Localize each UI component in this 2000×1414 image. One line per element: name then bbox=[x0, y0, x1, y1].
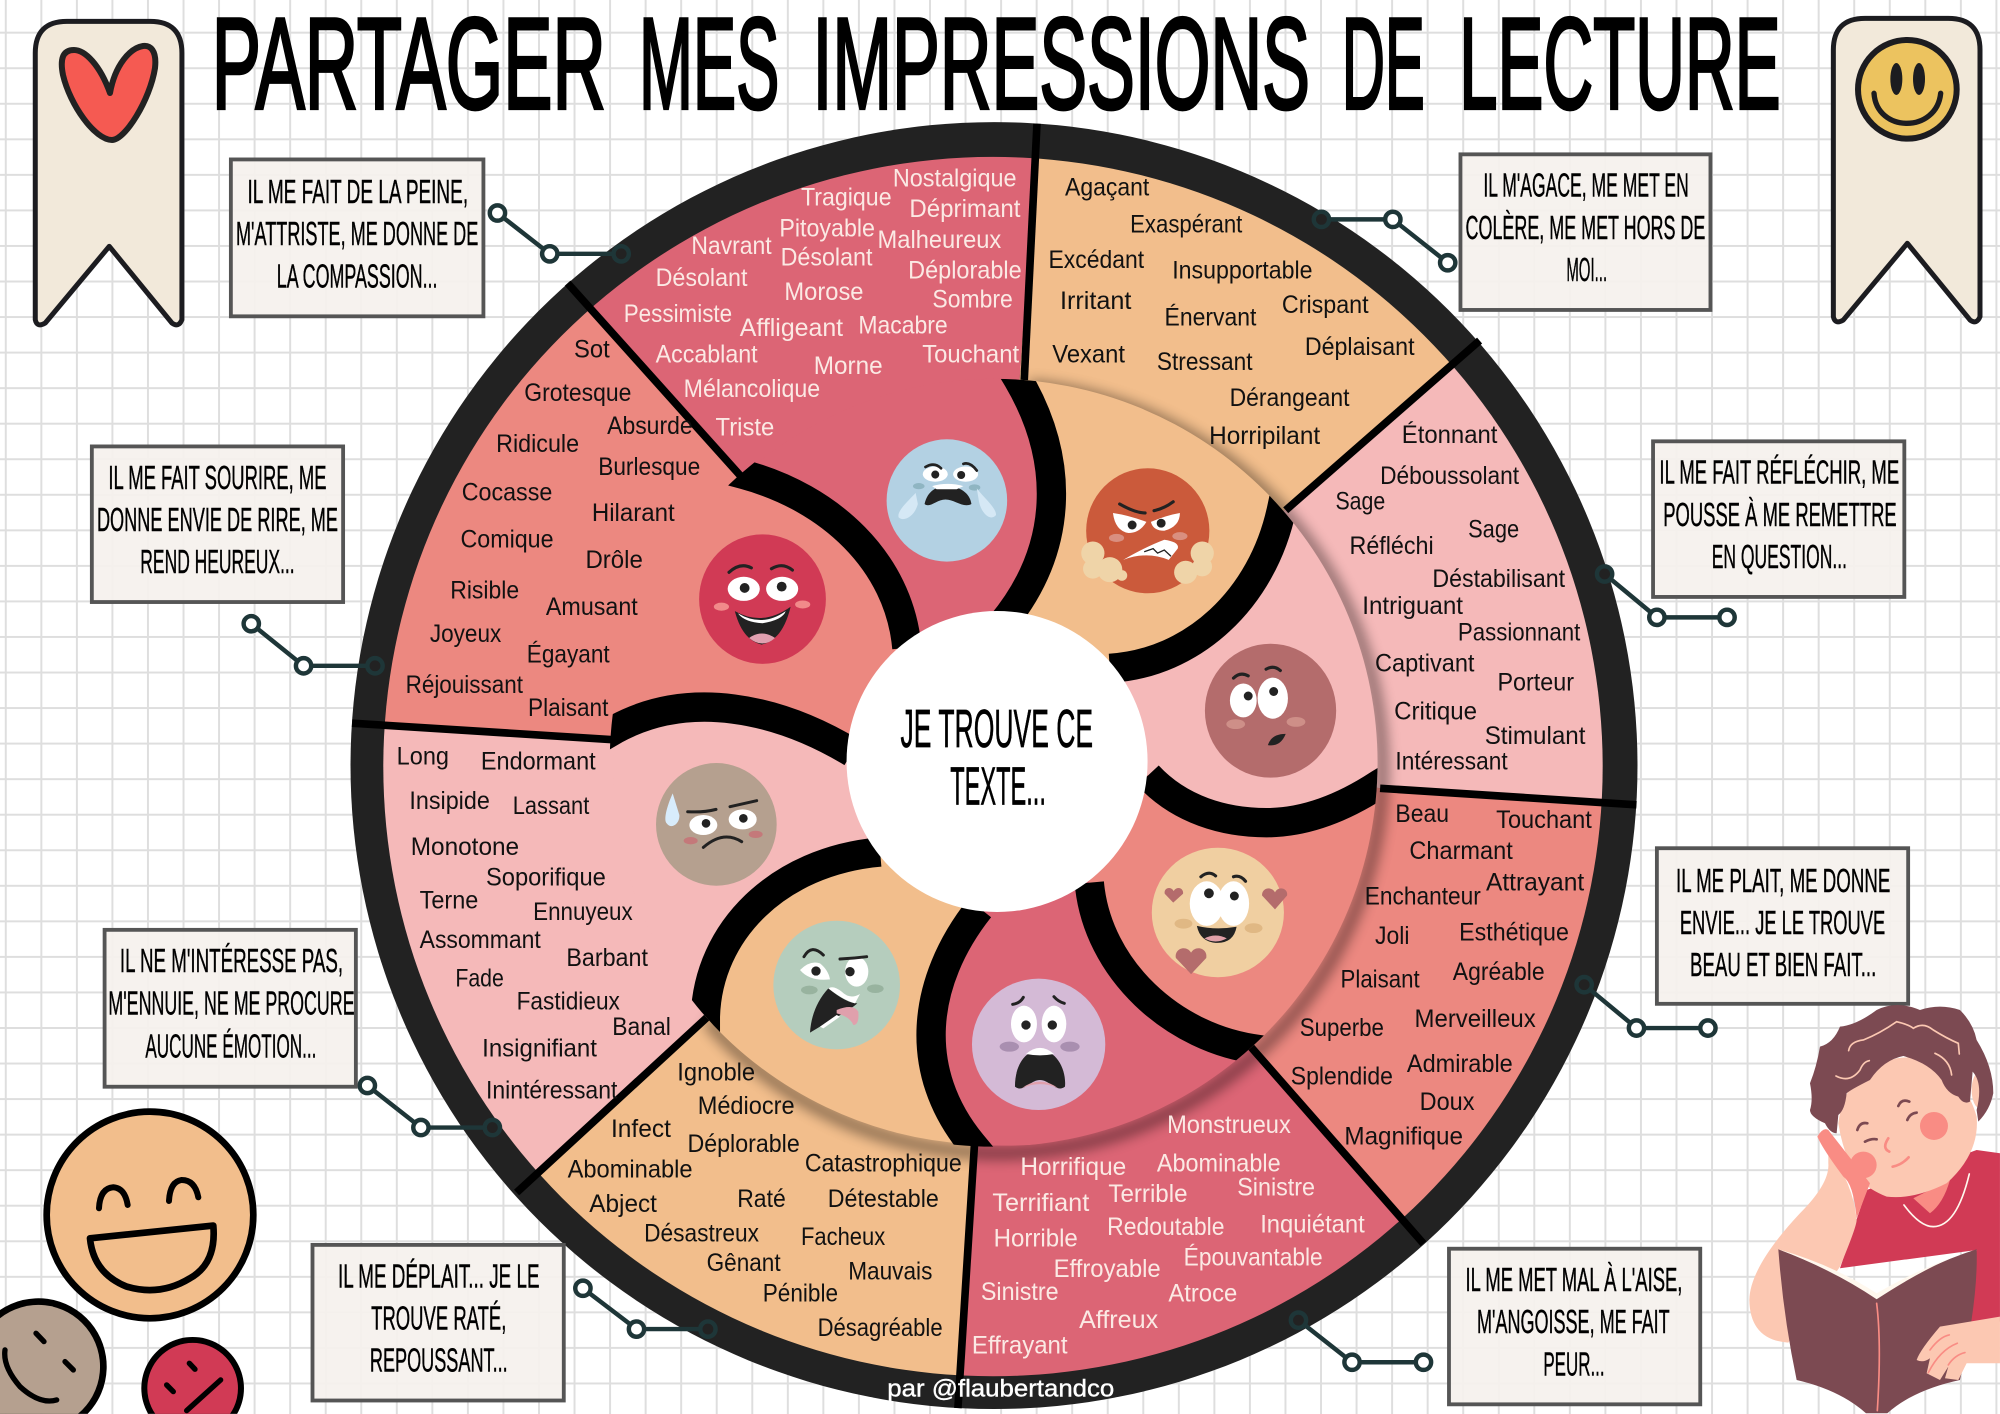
word list: dislike: Gênant bbox=[707, 1249, 781, 1277]
word list: anger: Énervant bbox=[1165, 303, 1256, 332]
connector: fear bbox=[1291, 1312, 1431, 1370]
callout: anger: COLÈRE, ME MET HORS DE bbox=[1466, 210, 1705, 247]
connector: amusement bbox=[244, 616, 383, 673]
callout: anger bbox=[1460, 154, 1710, 310]
center circle with text: JE TROUVE CE bbox=[901, 700, 1093, 759]
word list: beauty: Joli bbox=[1375, 922, 1409, 950]
word list: boredom: Long bbox=[397, 742, 449, 770]
word list: sadness: Accablant bbox=[656, 341, 758, 369]
word list: sadness: Désolant bbox=[656, 264, 748, 292]
callout: dislike: IL ME DÉPLAIT... JE LE bbox=[338, 1258, 540, 1295]
word list: fear: Sinistre bbox=[1237, 1173, 1315, 1201]
callout: beauty bbox=[1657, 848, 1908, 1004]
word list: beauty: Beau bbox=[1395, 800, 1449, 828]
word list: boredom: Inintéressant bbox=[486, 1077, 617, 1105]
word list: sadness: Pitoyable bbox=[779, 214, 875, 242]
word list: reflection bbox=[1335, 420, 1586, 775]
emoji: crying blue face bbox=[887, 439, 1007, 562]
callout: fear: IL ME MET MAL À L'AISE, bbox=[1466, 1262, 1682, 1299]
word list: beauty: Magnifique bbox=[1344, 1122, 1463, 1150]
word list: sadness: Touchant bbox=[922, 341, 1019, 369]
connector: reflection bbox=[1597, 566, 1735, 625]
word list: fear: Effrayant bbox=[972, 1332, 1068, 1360]
word list: reflection: Captivant bbox=[1375, 649, 1475, 677]
callout: amusement: IL ME FAIT SOURIRE, ME bbox=[108, 460, 327, 497]
word list: beauty: Doux bbox=[1420, 1088, 1475, 1116]
word list: sadness: Affligeant bbox=[740, 314, 843, 342]
word list: dislike bbox=[568, 1059, 962, 1342]
emoji: angry red-orange face bbox=[1081, 468, 1214, 593]
icon: bookmark with heart bbox=[35, 21, 182, 325]
word list: boredom: Endormant bbox=[481, 747, 596, 775]
word list: beauty: Attrayant bbox=[1486, 869, 1584, 897]
word list: beauty: Splendide bbox=[1291, 1063, 1393, 1091]
word list: boredom: Soporifique bbox=[486, 864, 606, 892]
word list: boredom: Terne bbox=[420, 887, 478, 915]
callout: boredom: AUCUNE ÉMOTION... bbox=[145, 1029, 316, 1066]
callout: dislike: TROUVE RATÉ, bbox=[371, 1300, 506, 1337]
word list: fear bbox=[972, 1111, 1365, 1360]
word list: fear: Effroyable bbox=[1054, 1255, 1161, 1283]
word list: dislike: Ignoble bbox=[677, 1059, 755, 1087]
word list: sadness: Malheureux bbox=[878, 226, 1002, 254]
word list: beauty: Admirable bbox=[1407, 1050, 1513, 1078]
word list: beauty: Charmant bbox=[1409, 837, 1513, 865]
emoji: scared purple face bbox=[972, 979, 1105, 1110]
word list: reflection: Passionnant bbox=[1458, 619, 1580, 647]
word list: anger: Horripilant bbox=[1209, 422, 1320, 450]
word list: fear: Redoutable bbox=[1107, 1213, 1224, 1241]
word list: amusement: Cocasse bbox=[462, 478, 552, 506]
word list: amusement: Drôle bbox=[585, 546, 643, 574]
word list: dislike: Raté bbox=[737, 1185, 786, 1213]
word list: fear: Épouvantable bbox=[1184, 1243, 1323, 1272]
emoji: happy red face bbox=[699, 534, 826, 664]
callout: fear bbox=[1449, 1249, 1700, 1404]
word list: anger: Agaçant bbox=[1065, 173, 1149, 201]
emoji: annoyed taupe face bbox=[656, 763, 777, 886]
word list: beauty: Esthétique bbox=[1459, 918, 1569, 946]
word list: amusement: Burlesque bbox=[598, 453, 700, 481]
callout: dislike bbox=[313, 1245, 564, 1401]
word list: amusement: Ridicule bbox=[496, 430, 579, 458]
word list: sadness: Tragique bbox=[801, 184, 892, 212]
word list: fear: Terrible bbox=[1108, 1180, 1187, 1208]
word list: sadness: Désolant bbox=[781, 244, 873, 272]
connector: dislike bbox=[575, 1281, 716, 1337]
word list: sadness: Morose bbox=[784, 278, 864, 306]
connector: anger bbox=[1314, 212, 1455, 270]
emoji: love face with hearts bbox=[1152, 848, 1287, 977]
word list: anger: Excédant bbox=[1048, 246, 1144, 274]
word list: fear: Abominable bbox=[1157, 1149, 1281, 1177]
emoji: disgusted green face bbox=[773, 921, 900, 1049]
word list: boredom: Assommant bbox=[420, 926, 541, 954]
word list: dislike: Désagréable bbox=[818, 1314, 943, 1342]
credit: par @flaubertandco bbox=[887, 1376, 1114, 1403]
word list: reflection: Étonnant bbox=[1402, 420, 1498, 449]
icon: red smiley bbox=[141, 1337, 244, 1414]
word list: sadness bbox=[624, 165, 1022, 441]
callout: anger: IL M'AGACE, ME MET EN bbox=[1483, 168, 1689, 205]
word list: anger: Vexant bbox=[1052, 341, 1125, 369]
word list: sadness: Déplorable bbox=[908, 256, 1022, 284]
word list: boredom: Monotone bbox=[411, 833, 519, 861]
word list: reflection: Déstabilisant bbox=[1432, 565, 1565, 593]
word list: beauty bbox=[1291, 800, 1592, 1150]
pinwheel petals bbox=[613, 378, 1379, 1146]
callout: boredom bbox=[105, 930, 356, 1087]
word list: boredom: Insignifiant bbox=[482, 1034, 597, 1062]
black pinwheel bands bbox=[599, 366, 1395, 1159]
word list: boredom: Insipide bbox=[409, 787, 490, 815]
word list: dislike: Pénible bbox=[763, 1279, 838, 1307]
word list: boredom: Fade bbox=[455, 964, 504, 992]
word list: amusement: Sot bbox=[574, 335, 610, 363]
word list: amusement: Absurde bbox=[607, 412, 693, 440]
callout: amusement: REND HEUREUX... bbox=[140, 544, 295, 581]
word list: boredom bbox=[397, 742, 671, 1105]
word list: fear: Affreux bbox=[1079, 1306, 1159, 1334]
word list: fear: Monstrueux bbox=[1167, 1111, 1291, 1139]
title bbox=[212, 0, 1781, 136]
word list: amusement: Joyeux bbox=[430, 620, 502, 648]
word list: anger: Irritant bbox=[1060, 287, 1131, 315]
word list: sadness: Morne bbox=[814, 352, 883, 380]
word list: anger: Exaspérant bbox=[1130, 210, 1242, 238]
word list: beauty: Plaisant bbox=[1341, 966, 1420, 994]
word list: reflection: Porteur bbox=[1497, 668, 1574, 696]
callout: boredom: M'ENNUIE, NE ME PROCURE bbox=[108, 985, 355, 1022]
word list: fear: Horrible bbox=[994, 1225, 1078, 1253]
callout: boredom: IL NE M'INTÉRESSE PAS, bbox=[120, 943, 343, 980]
word list: anger: Dérangeant bbox=[1230, 384, 1350, 412]
word list: boredom: Lassant bbox=[513, 792, 589, 820]
center circle with text bbox=[847, 611, 1148, 912]
word list: reflection: Stimulant bbox=[1485, 722, 1586, 750]
word list: boredom: Fastidieux bbox=[517, 987, 620, 1015]
word list: reflection: Critique bbox=[1394, 698, 1477, 726]
center circle with text: TEXTE... bbox=[950, 757, 1046, 816]
callout: reflection: EN QUESTION... bbox=[1712, 539, 1847, 576]
word list: sadness: Sombre bbox=[932, 286, 1013, 314]
word list: sadness: Déprimant bbox=[909, 195, 1020, 223]
callout: sadness: M'ATTRISTE, ME DONNE DE bbox=[236, 216, 478, 253]
wheel bbox=[350, 122, 1638, 1409]
word list: sadness: Macabre bbox=[858, 311, 948, 339]
word list: amusement: Plaisant bbox=[528, 694, 608, 722]
word list: reflection: Réfléchi bbox=[1349, 532, 1434, 560]
icon: laughing orange smiley bbox=[47, 1112, 253, 1318]
icon: taupe smiley bbox=[0, 1298, 107, 1414]
word list: dislike: Médiocre bbox=[698, 1092, 795, 1120]
outer dark ring bbox=[351, 122, 1637, 1409]
word list: dislike: Catastrophique bbox=[805, 1149, 962, 1177]
emoji: thinking brown face bbox=[1205, 644, 1336, 778]
word list: dislike: Mauvais bbox=[848, 1258, 932, 1286]
word list: amusement: Comique bbox=[460, 526, 554, 554]
word list: dislike: Abject bbox=[589, 1190, 657, 1218]
connector: boredom bbox=[360, 1078, 500, 1135]
callout: reflection bbox=[1653, 441, 1904, 597]
word list: beauty: Agréable bbox=[1453, 958, 1545, 986]
word list: dislike: Facheux bbox=[801, 1223, 886, 1251]
word list: beauty: Merveilleux bbox=[1415, 1005, 1536, 1033]
connector: sadness bbox=[490, 205, 629, 261]
callout: anger: MOI... bbox=[1566, 252, 1607, 289]
callout: fear: PEUR... bbox=[1543, 1346, 1605, 1383]
word list: anger: Insupportable bbox=[1172, 256, 1312, 284]
word list: dislike: Désastreux bbox=[644, 1219, 759, 1247]
word list: fear: Sinistre bbox=[981, 1278, 1059, 1306]
word list: reflection: Intéressant bbox=[1395, 747, 1508, 775]
word list: fear: Horrifique bbox=[1020, 1153, 1126, 1181]
word list: dislike: Détestable bbox=[828, 1185, 939, 1213]
word list: fear: Inquiétant bbox=[1260, 1210, 1365, 1238]
callout: amusement bbox=[92, 446, 343, 602]
word list: fear: Terrifiant bbox=[992, 1189, 1089, 1217]
word list: reflection: Intriguant bbox=[1362, 592, 1463, 620]
outer sectors bbox=[383, 156, 1603, 1376]
word list: dislike: Abominable bbox=[568, 1156, 693, 1184]
word list: fear: Atroce bbox=[1168, 1279, 1237, 1307]
callout: dislike: REPOUSSANT... bbox=[370, 1342, 508, 1379]
word list: anger: Crispant bbox=[1282, 291, 1369, 319]
icon: bookmark with yellow smiley bbox=[1833, 18, 1980, 322]
word list: amusement: Grotesque bbox=[524, 379, 631, 407]
word list: amusement bbox=[406, 335, 700, 722]
word list: amusement: Hilarant bbox=[592, 499, 675, 527]
word list: sadness: Nostalgique bbox=[893, 165, 1017, 193]
word list: sadness: Triste bbox=[716, 413, 774, 441]
word list: reflection: Déboussolant bbox=[1380, 462, 1519, 490]
word list: anger bbox=[1048, 173, 1415, 450]
word list: boredom: Banal bbox=[612, 1013, 671, 1041]
callout: amusement: DONNE ENVIE DE RIRE, ME bbox=[97, 502, 338, 539]
word list: dislike: Infect bbox=[611, 1115, 671, 1143]
word list: dislike: Déplorable bbox=[688, 1130, 800, 1158]
word list: amusement: Amusant bbox=[546, 593, 638, 621]
word list: reflection: Sage bbox=[1468, 515, 1519, 543]
word list: amusement: Risible bbox=[450, 577, 519, 605]
word list: sadness: Navrant bbox=[691, 232, 772, 260]
word list: anger: Déplaisant bbox=[1305, 333, 1415, 361]
word list: beauty: Enchanteur bbox=[1365, 883, 1481, 911]
callout: sadness: LA COMPASSION... bbox=[277, 258, 438, 295]
callout: sadness bbox=[231, 159, 483, 316]
word list: sadness: Mélancolique bbox=[684, 375, 820, 403]
callout: fear: M'ANGOISSE, ME FAIT bbox=[1477, 1304, 1670, 1341]
word list: boredom: Ennuyeux bbox=[533, 898, 633, 926]
word list: amusement: Égayant bbox=[527, 639, 610, 668]
word list: anger: Stressant bbox=[1157, 348, 1253, 376]
illustration: child reading a book bbox=[1749, 1005, 2000, 1413]
word list: beauty: Superbe bbox=[1300, 1014, 1384, 1042]
word list: sadness: Pessimiste bbox=[624, 300, 732, 328]
word list: beauty: Touchant bbox=[1496, 806, 1592, 834]
sector dividers bbox=[352, 124, 1636, 1408]
word list: reflection: Sage bbox=[1335, 487, 1385, 515]
callout: sadness: IL ME FAIT DE LA PEINE, bbox=[247, 174, 468, 211]
word list: boredom: Barbant bbox=[566, 944, 648, 972]
connector: beauty bbox=[1577, 977, 1716, 1036]
word list: amusement: Réjouissant bbox=[406, 671, 523, 699]
